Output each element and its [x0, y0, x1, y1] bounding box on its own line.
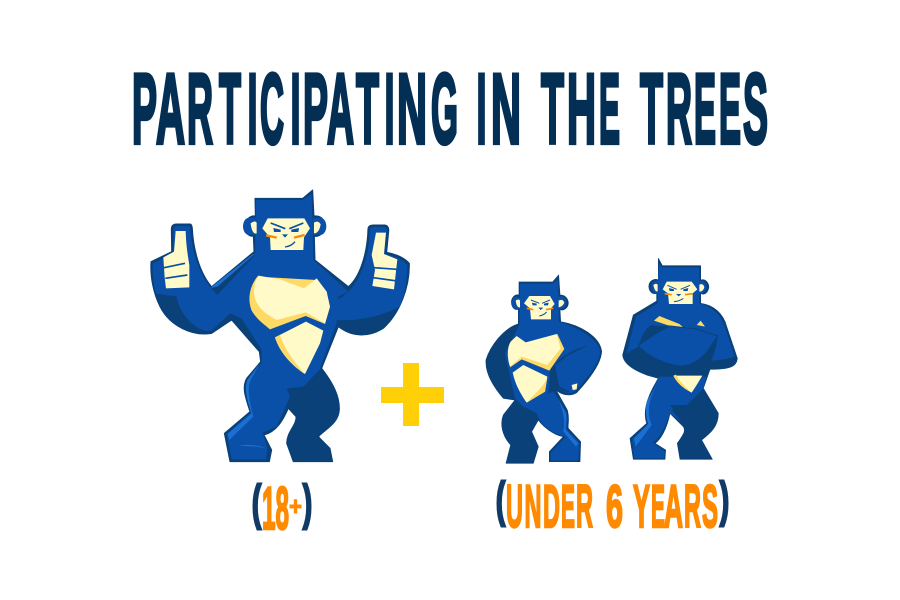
title: T	[640, 53, 663, 164]
ears	[243, 218, 326, 235]
arm shadow	[624, 336, 737, 374]
face	[663, 282, 697, 304]
label: under 6 years: D	[543, 473, 560, 540]
label: under 6 years: A	[664, 473, 683, 540]
dark leg	[504, 401, 537, 463]
chest glimpse top	[654, 316, 683, 327]
silhouette outline	[151, 190, 409, 462]
label: under 6 years: 6	[606, 473, 623, 540]
title: E	[599, 53, 620, 164]
title: T	[356, 53, 379, 164]
silhouette	[623, 258, 737, 459]
leg highlight	[557, 397, 578, 447]
label: under 6 years: R	[576, 473, 593, 540]
face	[524, 296, 555, 319]
title: R	[187, 53, 213, 164]
body fill	[505, 279, 600, 461]
title: A	[327, 53, 354, 164]
dark leg	[672, 390, 717, 459]
title: E	[694, 53, 716, 164]
label: 18+	[252, 475, 312, 542]
label: 18+: +	[289, 491, 302, 521]
bent arm	[549, 346, 587, 392]
adult left arm shadow	[157, 296, 210, 332]
lower chest	[513, 365, 547, 403]
title: N	[397, 53, 427, 164]
thumbs and fingers, right	[372, 233, 397, 289]
title: T	[541, 53, 564, 164]
label: under 6 years: S	[702, 473, 718, 540]
leg highlight	[634, 385, 657, 447]
icon: adult gorilla giving two thumbs up	[151, 190, 409, 462]
text: S	[743, 53, 768, 164]
lower body fill	[632, 377, 707, 458]
legs: dark far leg	[287, 373, 337, 462]
dark arm shadow	[488, 332, 515, 398]
label: under 6 years: E	[651, 473, 665, 540]
title: I	[384, 53, 394, 164]
icon: child gorilla with hand on hip	[486, 275, 602, 463]
upper chest	[254, 276, 330, 323]
body fill	[626, 263, 735, 365]
title: P	[303, 53, 328, 164]
ears	[512, 296, 566, 309]
label: 18+: (	[252, 477, 261, 530]
label: 18+: )	[303, 477, 312, 530]
title: I	[248, 53, 258, 164]
lower chest	[275, 322, 323, 374]
title: C	[260, 53, 284, 164]
label: under 6 years: )	[720, 474, 729, 527]
upper chest	[508, 334, 561, 367]
title: P	[132, 53, 157, 164]
upper chest shadow	[249, 277, 330, 329]
title: E	[719, 53, 741, 164]
chest below arms	[673, 376, 702, 393]
crossed arms	[638, 326, 718, 366]
title: G	[431, 53, 458, 164]
title	[132, 53, 768, 164]
label: under 6 years: N	[524, 473, 542, 540]
thumbs and fingers, left	[163, 231, 189, 288]
ears	[651, 281, 706, 293]
title: I	[290, 53, 300, 164]
icon: child gorilla with crossed arms	[623, 258, 737, 459]
label: under 6 years: R	[684, 473, 701, 540]
label: under 6 years	[496, 473, 729, 540]
main body fill	[153, 194, 348, 459]
title: R	[666, 53, 692, 164]
silhouette	[486, 275, 602, 463]
title: T	[219, 53, 241, 164]
right arm fill	[337, 227, 407, 320]
label: 18+: 18	[262, 475, 289, 542]
label: under 6 years: (	[496, 474, 505, 527]
title: A	[156, 53, 185, 164]
title: I	[476, 53, 486, 164]
label: under 6 years: Y	[633, 473, 650, 540]
label: under 6 years: U	[506, 473, 523, 540]
title: H	[567, 53, 596, 164]
leg highlight	[228, 364, 259, 440]
plus sign	[381, 363, 444, 426]
title: N	[491, 53, 521, 164]
label: under 6 years: E	[561, 473, 575, 540]
upper chest shadow	[510, 334, 564, 371]
arm highlight	[212, 254, 254, 287]
face	[262, 218, 310, 250]
